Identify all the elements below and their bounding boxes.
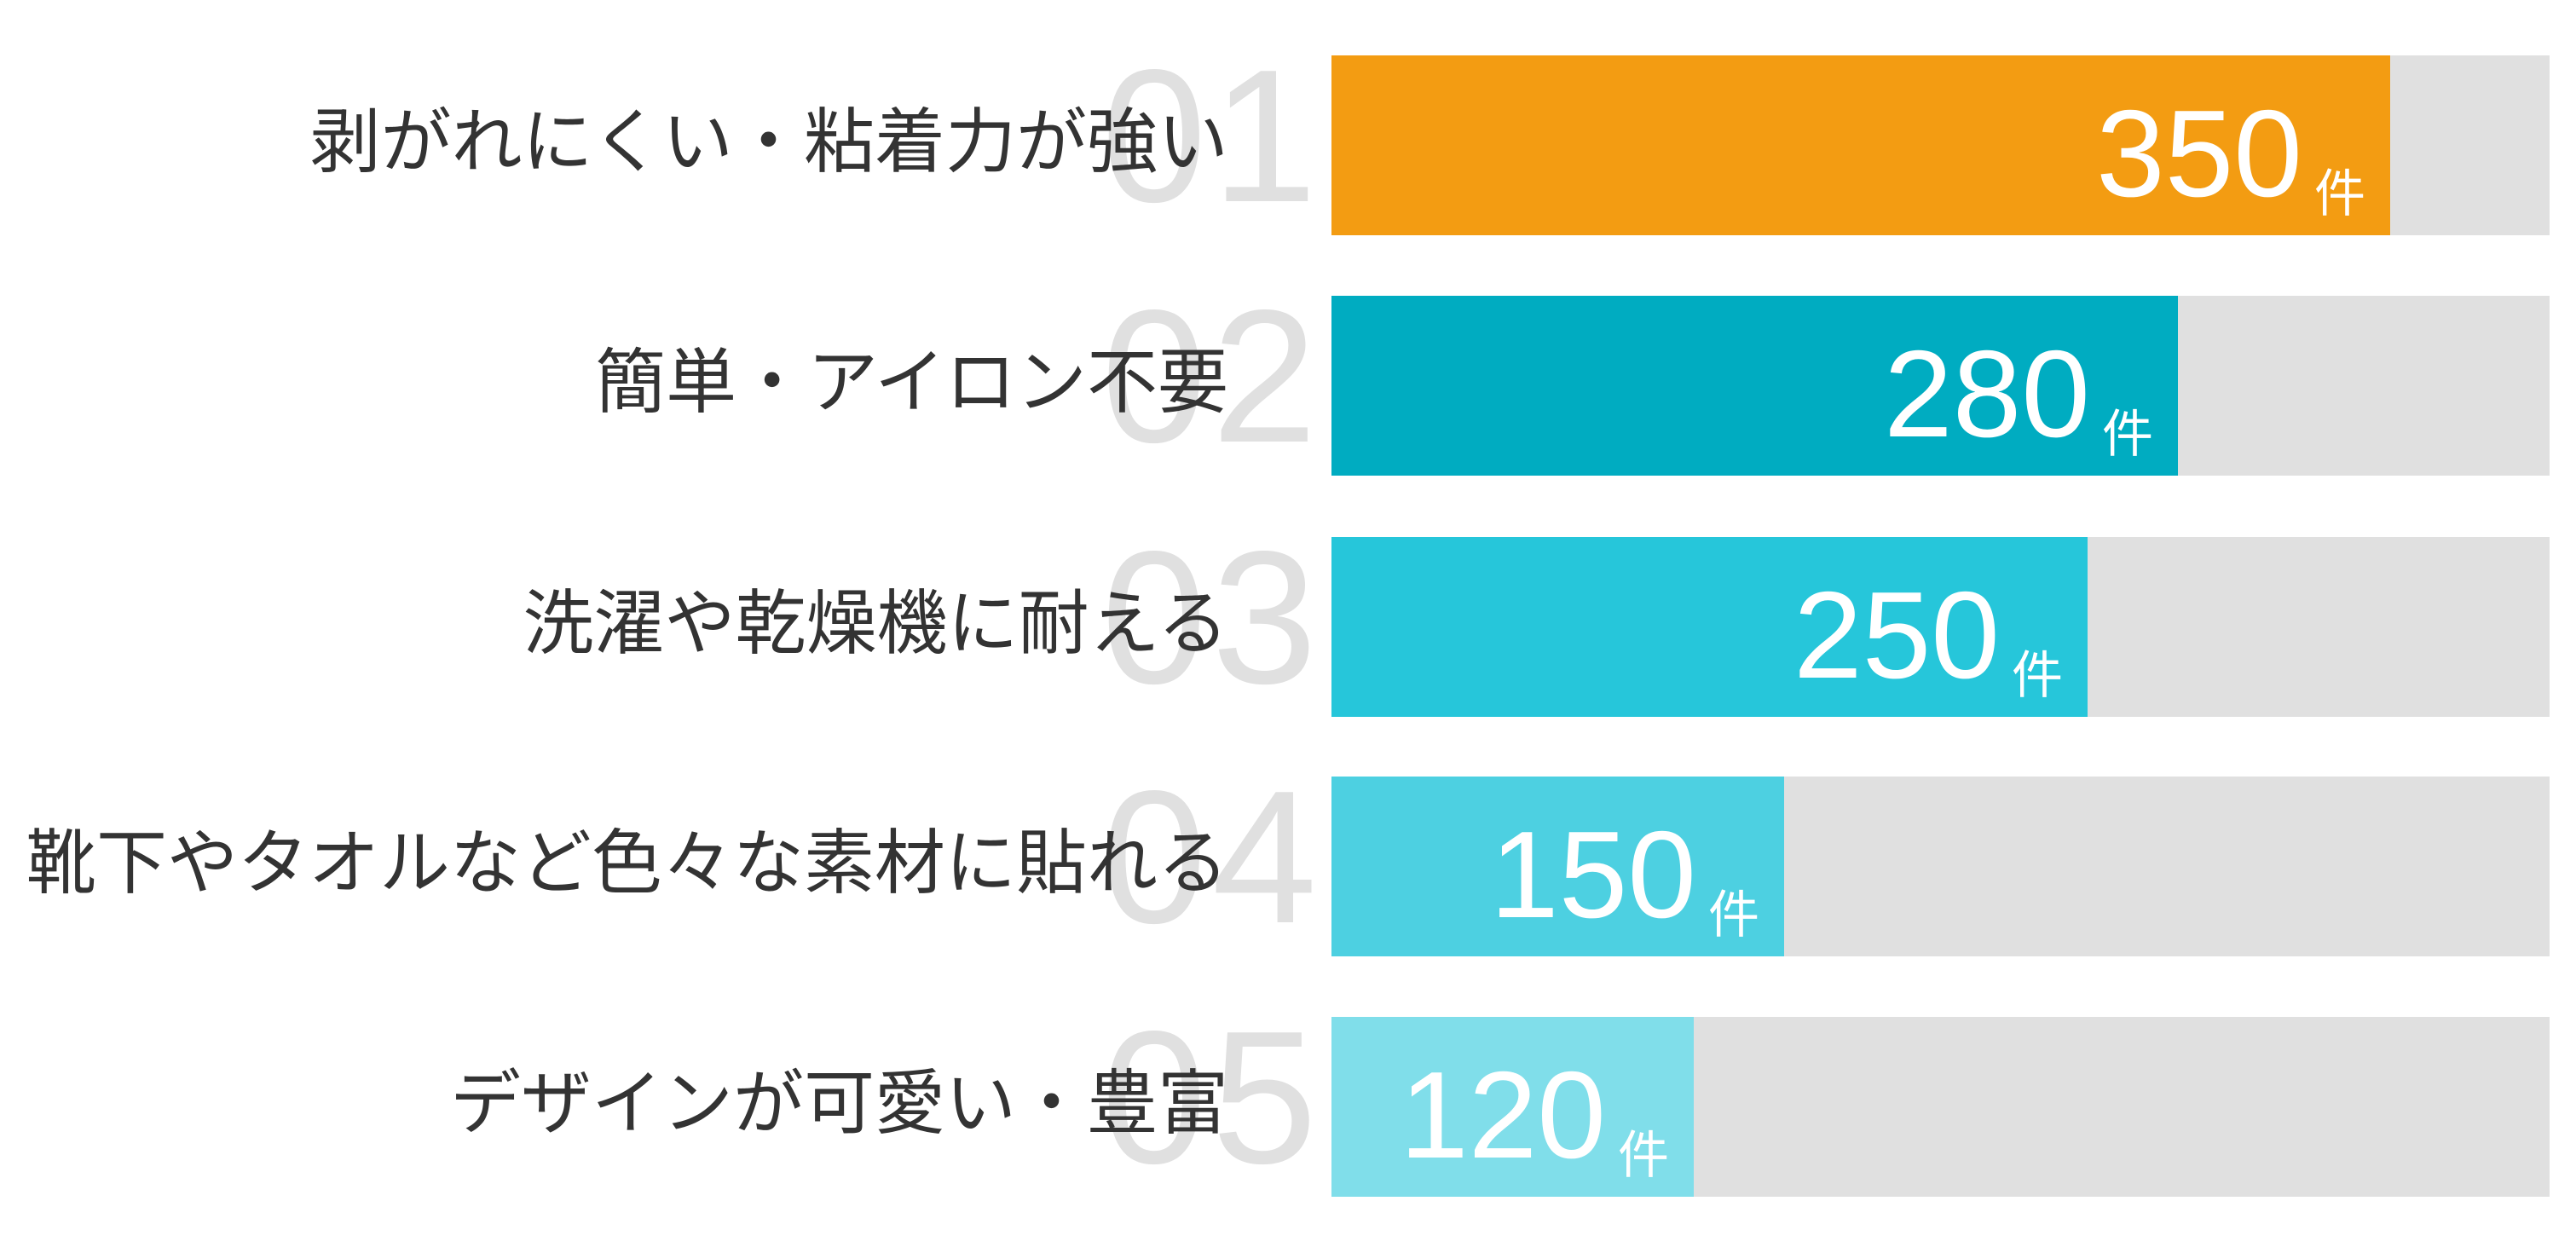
value 5: 120 xyxy=(1400,1046,1606,1184)
row 4 xyxy=(26,752,2550,963)
label 3: 洗濯や乾燥機に耐える xyxy=(523,584,1228,663)
value 3: 件 xyxy=(2012,647,2063,704)
value 3: 250 xyxy=(1793,566,2000,704)
row 5 xyxy=(450,992,2550,1204)
rank number 01: 01 xyxy=(1101,31,1322,242)
bar 1 xyxy=(1331,55,2390,235)
label 1: 剥がれにくい・粘着力が強い xyxy=(310,102,1228,182)
value 2: 件 xyxy=(2102,406,2153,463)
track 3 xyxy=(1331,537,2550,717)
rank number 05: 05 xyxy=(1101,992,1322,1204)
row 1 xyxy=(310,31,2550,242)
label 2: 簡単・アイロン不要 xyxy=(595,343,1228,422)
label 4: 靴下やタオルなど色々な素材に貼れる xyxy=(26,823,1228,903)
track 4 xyxy=(1331,777,2550,956)
bar 3 xyxy=(1331,537,2088,717)
bar 4 xyxy=(1331,777,1784,956)
row 2 xyxy=(595,271,2550,482)
track 1 xyxy=(1331,55,2550,235)
value 1: 350 xyxy=(2096,84,2302,222)
label 5: デザインが可愛い・豊富 xyxy=(450,1064,1228,1143)
rank number 04: 04 xyxy=(1101,752,1322,963)
bar 5 xyxy=(1331,1017,1694,1197)
row 3 xyxy=(523,512,2550,724)
bar 2 xyxy=(1331,296,2178,476)
value 4: 件 xyxy=(1708,886,1759,944)
track 5 xyxy=(1331,1017,2550,1197)
value 2: 280 xyxy=(1884,325,2090,463)
rank number 02: 02 xyxy=(1101,271,1322,482)
value 1: 件 xyxy=(2314,165,2365,222)
rank number 03: 03 xyxy=(1101,512,1322,724)
track 2 xyxy=(1331,296,2550,476)
value 4: 150 xyxy=(1490,806,1696,944)
value 5: 件 xyxy=(1618,1127,1669,1184)
